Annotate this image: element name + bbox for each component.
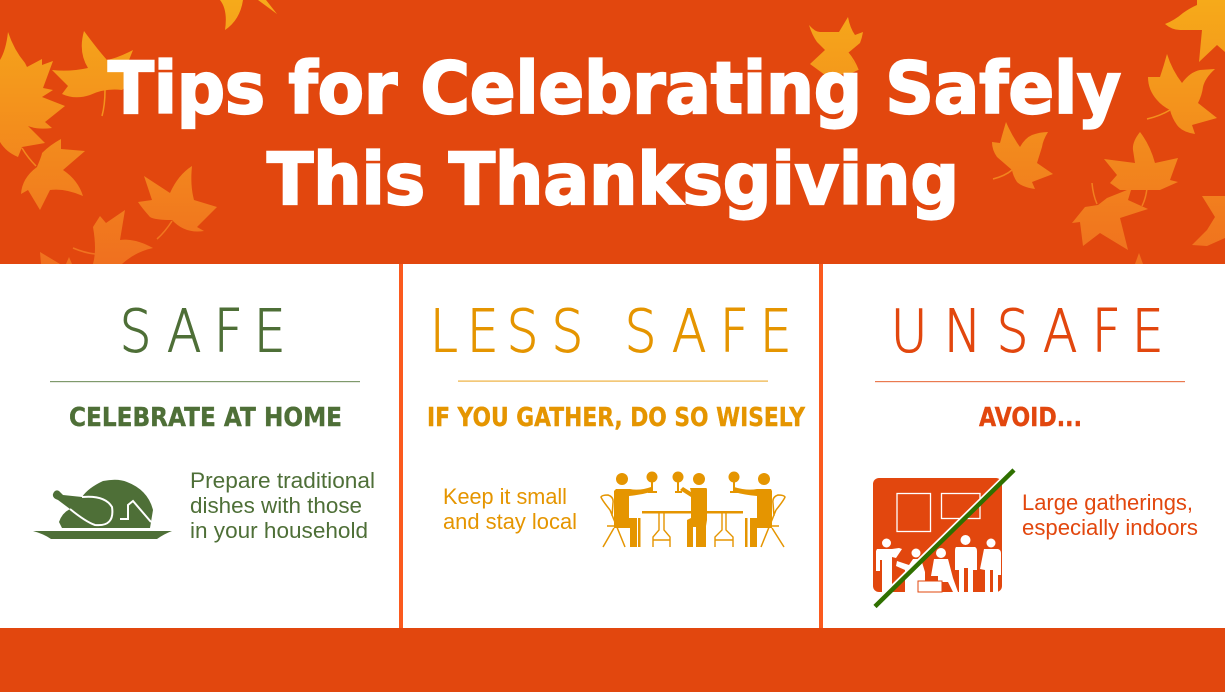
stem [848,53,858,70]
subheading: IF YOU GATHER, DO SO WISELY [427,403,805,433]
stem [1092,183,1097,204]
panel background [823,264,1225,628]
body text: Keep it small [443,484,567,509]
stem [22,148,36,166]
leaf [1135,253,1143,264]
panel background [403,264,819,628]
subheading: CELEBRATE AT HOME [69,403,342,433]
body text: especially indoors [1022,515,1198,540]
heading: LESS SAFE [430,297,792,366]
heading: SAFE [120,297,286,366]
leaf [1072,190,1148,250]
right person [728,472,785,547]
title line 2: This Thanksgiving [267,138,959,221]
leaf [809,17,863,75]
left person [601,472,658,547]
body text: Large gatherings, [1022,490,1193,515]
icon: roast turkey [33,480,172,539]
heading: UNSAFE [891,297,1164,366]
leaf stems [22,53,1170,254]
leaf [220,0,277,30]
table [642,511,743,547]
center person [672,472,707,547]
leaf [93,210,153,264]
body text: in your household [190,518,368,543]
panel background [0,264,399,628]
leaf [52,31,137,97]
leaf [1165,0,1225,62]
panel: safe [0,264,399,628]
leaf [40,252,72,264]
leaf [1192,196,1225,246]
stem [102,90,105,116]
stem [1147,110,1170,119]
stem [993,170,1012,179]
leaf [992,122,1053,189]
leaf [1148,54,1217,134]
autumn leaves [0,0,1225,264]
leaf [21,139,85,210]
body text: Prepare traditional [190,468,375,493]
body text: dishes with those [190,493,362,518]
panel dividers [399,264,823,628]
subheading: AVOID... [979,403,1082,433]
leaf [0,32,65,157]
icon: crowded room crossed out [873,468,1014,606]
leaf [138,166,217,232]
crowd of people [876,535,1001,592]
stem [73,248,95,254]
stem [157,221,172,239]
panel: unsafe [823,264,1225,628]
title line 1: Tips for Celebrating Safely [108,47,1121,130]
leaf [1104,132,1178,190]
icon: people toasting at a table [601,472,785,547]
crossing line [873,468,1014,606]
panel: less safe [403,264,819,628]
title [108,47,1121,221]
stem [1142,188,1147,206]
body text: and stay local [443,509,577,534]
